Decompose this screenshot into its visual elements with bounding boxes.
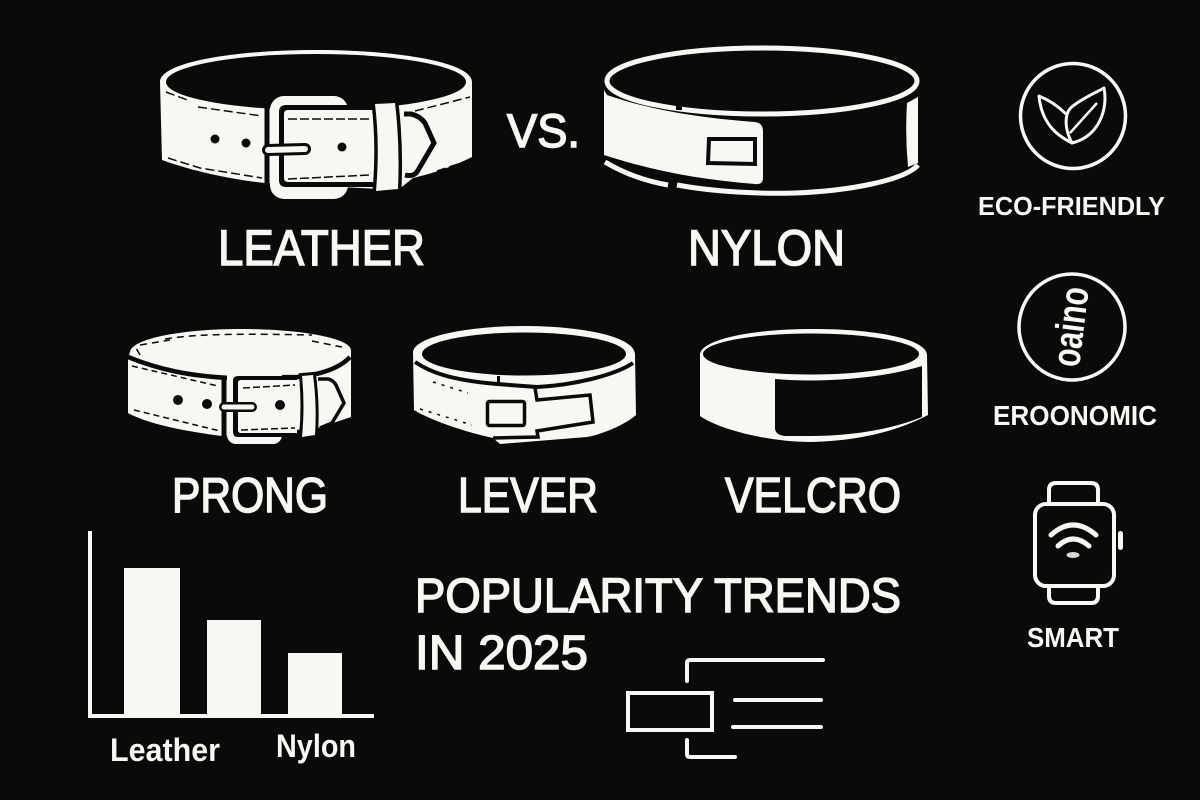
heading: popularity trends: IN 2025 [415, 627, 588, 680]
label: prong: PRONG [172, 469, 328, 523]
icon: circle with rotated glyphs: oaino [1044, 284, 1098, 369]
icon: leaves in circle [1020, 64, 1126, 168]
chart axes [90, 531, 374, 716]
icon: lever belt [413, 326, 636, 444]
panel: lever belt [413, 326, 636, 523]
label: eroonomic: EROONOMIC [993, 400, 1157, 431]
panel: prong belt [128, 329, 351, 523]
icon: smartwatch with wifi [1035, 483, 1123, 603]
label: lever: LEVER [458, 469, 598, 523]
icon: prong belt [128, 329, 351, 444]
axis label: leather: Leather [110, 732, 220, 768]
icon: nylon belt [604, 48, 918, 193]
heading: popularity trends: POPULARITY TRENDS [415, 570, 901, 623]
panel: leather belt [160, 50, 472, 276]
panel: smart [1027, 483, 1123, 653]
bar: leather [124, 568, 180, 716]
label: eco-friendly: ECO-FRIENDLY [978, 191, 1165, 221]
icon: velcro belt [700, 329, 928, 442]
label: nylon: NYLON [688, 220, 845, 276]
text: vs.: VS. [507, 104, 580, 157]
bar chart [90, 531, 374, 768]
label: velcro: VELCRO [725, 469, 901, 523]
panel: velcro belt [700, 329, 928, 523]
panel: ergonomic [993, 274, 1157, 431]
bar: middle [207, 620, 261, 716]
panel: eco-friendly [978, 64, 1165, 221]
label: leather: LEATHER [218, 220, 425, 276]
panel: nylon belt [604, 48, 918, 276]
diagram: box with branching lines [628, 660, 823, 757]
bar: nylon [288, 653, 342, 716]
heading: popularity trends [415, 570, 901, 680]
icon: leather belt with buckle [160, 50, 472, 199]
label: smart: SMART [1027, 622, 1119, 653]
axis label: nylon: Nylon [276, 728, 356, 764]
icon: circle with rotated glyphs [1019, 274, 1125, 380]
